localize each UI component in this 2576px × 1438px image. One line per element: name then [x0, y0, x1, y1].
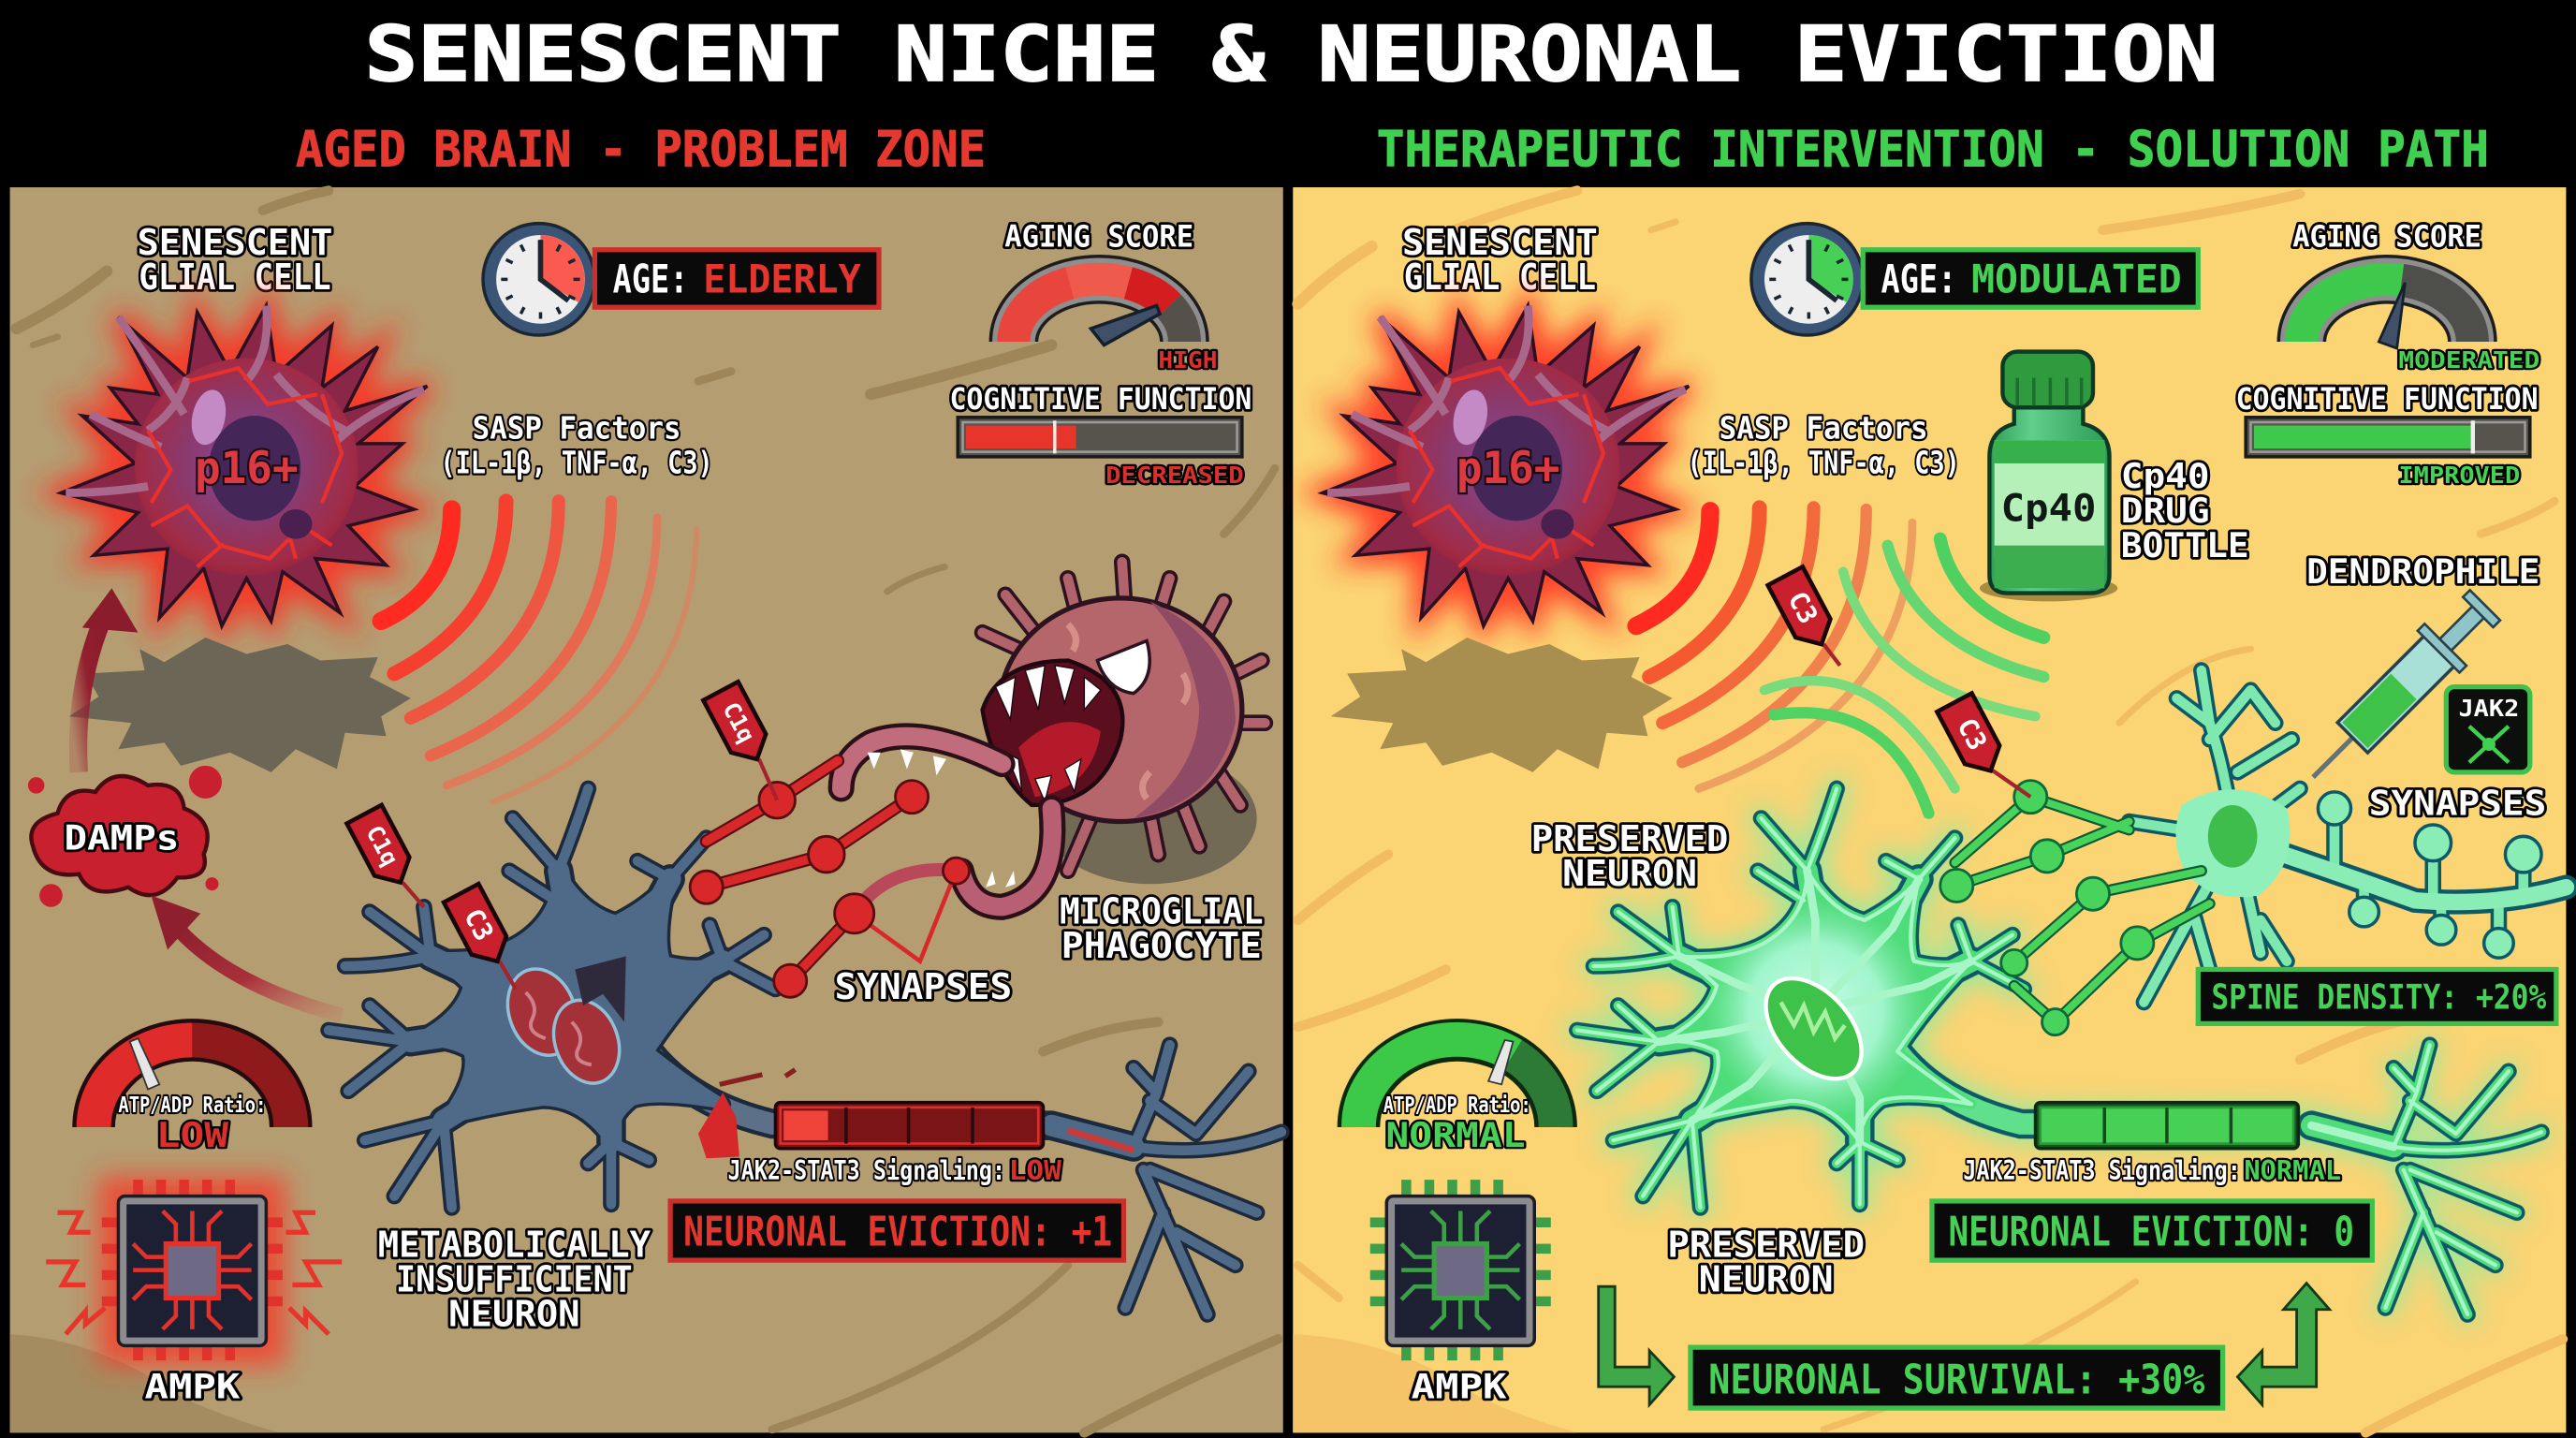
gauge: aging score, right: AGING SCORE [2292, 220, 2481, 254]
label: microglial phagocyte [1060, 890, 1264, 967]
tag: C1q upper [703, 682, 777, 800]
bar: cognitive function, right [2236, 383, 2539, 489]
stat box: neuronal eviction +1: NEURONAL EVICTION: +1 [683, 1208, 1112, 1255]
microglial phagocyte [842, 562, 1265, 907]
badge: JAK2 [2446, 687, 2530, 772]
bar: cognitive function, left: DECREASED [1105, 462, 1244, 489]
icon: AMPK chip, left [46, 1177, 342, 1365]
stat box: neuronal eviction +1 [670, 1201, 1123, 1260]
gauge: ATP ratio, left: LOW [156, 1115, 229, 1155]
gauge: aging score, left [1004, 220, 1218, 374]
label: AMPK, left: AMPK [145, 1367, 241, 1407]
SASP waves, right [1636, 507, 1912, 788]
bar: cognitive function, right: COGNITIVE FUNCTION [2236, 383, 2539, 417]
gauge: ATP ratio, right: ATP/ADP Ratio: [1383, 1093, 1531, 1118]
cell: senescent glial, right [1323, 305, 1689, 626]
label: Cp40 drug bottle: DRUG [2121, 491, 2210, 531]
label: preserved neuron, upper: NEURON [1562, 853, 1697, 895]
tag: C1q lower [347, 805, 424, 907]
smoke shadow, left [69, 638, 411, 772]
DAMPs cloud [28, 766, 222, 907]
badge: age modulated: MODULATED [1971, 256, 2182, 301]
icon: clock, right [1751, 224, 1863, 335]
label: senescent glial cell, right: SENESCENT [1402, 222, 1598, 264]
gauge: ATP ratio, right [1358, 1039, 1556, 1155]
bar: JAK2-STAT3, left [775, 1103, 1044, 1149]
label: SASP factors, right [1687, 410, 1960, 480]
label: metabolically insufficient neuron: METABOLICALLY [378, 1225, 651, 1267]
label: preserved neuron, lower: NEURON [1699, 1258, 1834, 1300]
green therapeutic waves [1764, 539, 2043, 814]
icon: clock, left [483, 224, 594, 335]
stat box: neuronal eviction 0 [1932, 1201, 2372, 1260]
panel: aged brain [10, 187, 1283, 1432]
label: senescent glial cell, left [138, 222, 332, 299]
label: SASP factors, right: SASP Factors [1720, 410, 1928, 447]
label: senescent glial cell, right [1402, 222, 1598, 299]
label: Cp40 drug bottle: Cp40 [2121, 456, 2210, 496]
tag: C1q upper: C1q [717, 697, 761, 747]
gauge: aging score, left: AGING SCORE [1004, 220, 1193, 254]
label: preserved neuron, upper: PRESERVED [1531, 818, 1728, 860]
label: synapses, left: SYNAPSES [835, 966, 1012, 1008]
gauge: aging score, right: MODERATED [2398, 346, 2539, 374]
arrow: smoke to glial cell [79, 588, 138, 772]
tag: C3 upper right: C3 [1781, 586, 1823, 629]
badge: JAK2: JAK2 [2458, 695, 2519, 722]
synapses, left [690, 761, 970, 997]
label: senescent glial cell, left: GLIAL CELL [139, 257, 331, 299]
label: SASP factors, left [440, 410, 713, 480]
synapses, green [1940, 781, 2210, 1035]
cell: senescent glial, left [61, 305, 427, 626]
smoke shadow, right [1331, 638, 1673, 772]
label: synapses, right: SYNAPSES [2369, 783, 2546, 823]
label: senescent glial cell, left: SENESCENT [138, 222, 332, 264]
gauge: ATP ratio, left [94, 1038, 291, 1155]
cell: senescent glial, right: p16+ [1456, 443, 1559, 494]
label: preserved neuron, lower: PRESERVED [1667, 1225, 1865, 1267]
badge: age elderly [594, 250, 879, 307]
arrow: neuron to DAMPs [152, 895, 342, 1016]
label: metabolically insufficient neuron: INSUFFICIENT [396, 1258, 633, 1300]
bar: cognitive function, right: IMPROVED [2398, 462, 2520, 489]
tag: C3 lower right [1937, 694, 2030, 797]
bar: cognitive function, left: COGNITIVE FUNCTION [949, 383, 1251, 417]
label: senescent glial cell, right: GLIAL CELL [1404, 257, 1596, 299]
label: preserved neuron, lower [1667, 1225, 1865, 1300]
label: JAK2 signaling normal: NORMAL [2244, 1155, 2341, 1186]
title: SENESCENT NICHE & NEURONAL EVICTION [365, 11, 2217, 99]
label: Cp40 drug bottle: BOTTLE [2121, 525, 2249, 565]
label: SASP factors, left: SASP Factors [473, 410, 681, 447]
drug bottle: Cp40 [1980, 352, 2117, 601]
dendrophile neuron, upper right [2130, 670, 2566, 1003]
label: dendrophile: DENDROPHILE [2306, 551, 2539, 592]
label: SASP factors, left: (IL-1β, TNF-α, C3) [440, 444, 713, 480]
gauge: ATP ratio, right: NORMAL [1385, 1115, 1526, 1155]
stat box: neuronal survival: NEURONAL SURVIVAL: +30% [1708, 1356, 2205, 1403]
gauge: aging score, right [2292, 220, 2539, 374]
drug bottle: Cp40: Cp40 [2001, 486, 2096, 530]
arrow: to neuronal survival [1599, 1286, 1674, 1405]
label: microglial phagocyte: MICROGLIAL [1060, 890, 1264, 932]
tag: C3 left [444, 884, 516, 990]
heading: therapeutic intervention: THERAPEUTIC INTERVENTION - SOLUTION PATH [1377, 121, 2489, 178]
tag: C3 upper right [1768, 566, 1840, 666]
tag: C3 left: C3 [458, 903, 500, 946]
stat box: spine density [2198, 969, 2556, 1023]
neuron: preserved, glowing [1577, 788, 2541, 1314]
cell: senescent glial, left: p16+ [195, 443, 299, 494]
tag: C1q lower: C1q [360, 821, 404, 871]
panel: therapeutic intervention [1293, 187, 2566, 1432]
badge: age modulated [1863, 250, 2198, 307]
label: Cp40 drug bottle [2121, 456, 2249, 565]
label: microglial phagocyte: PHAGOCYTE [1061, 925, 1262, 967]
heading: aged brain: AGED BRAIN - PROBLEM ZONE [296, 121, 986, 178]
badge: age modulated: AGE: [1881, 256, 1956, 301]
label: metabolically insufficient neuron [378, 1225, 651, 1335]
stat box: neuronal eviction 0: NEURONAL EVICTION: 0 [1949, 1208, 2354, 1255]
neuron: metabolically insufficient [329, 788, 1281, 1314]
gauge: aging score, left: HIGH [1158, 346, 1218, 374]
label: JAK2 signaling low: LOW [1009, 1155, 1061, 1186]
icon: AMPK chip, right [1370, 1180, 1551, 1360]
label: metabolically insufficient neuron: NEURON [448, 1293, 580, 1335]
label: JAK2 signaling normal: JAK2-STAT3 Signaling: [1963, 1155, 2241, 1186]
label: AMPK, right: AMPK [1412, 1367, 1507, 1407]
arrow: survival to eviction [2237, 1284, 2330, 1405]
gauge: ATP ratio, left: ATP/ADP Ratio: [118, 1093, 266, 1118]
tag: C3 lower right: C3 [1951, 712, 1993, 756]
icon: syringe [2292, 584, 2506, 798]
label: JAK2 signaling low: JAK2-STAT3 Signaling: [728, 1155, 1005, 1186]
DAMPs cloud: DAMPs [65, 817, 179, 858]
label: SASP factors, right: (IL-1β, TNF-α, C3) [1687, 444, 1960, 480]
badge: age elderly: AGE: [613, 256, 688, 301]
label: preserved neuron, upper [1531, 818, 1728, 895]
bar: cognitive function, left [949, 383, 1251, 489]
bar: JAK2-STAT3, right [2036, 1103, 2298, 1149]
SASP waves, left [381, 501, 696, 801]
badge: age elderly: ELDERLY [703, 256, 861, 301]
